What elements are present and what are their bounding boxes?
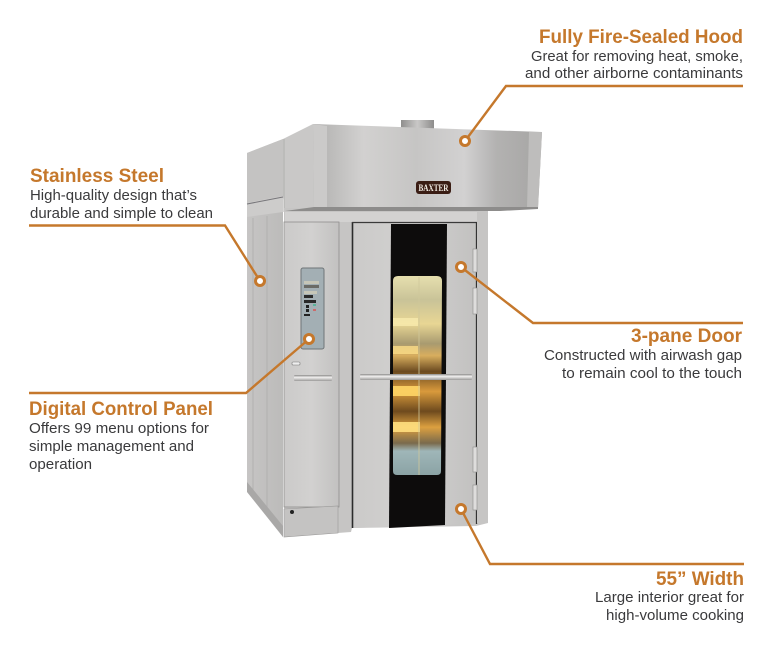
flue collar xyxy=(401,120,434,130)
callout: 3-pane Door: to remain cool to the touch xyxy=(562,366,742,382)
left key slot xyxy=(292,362,300,365)
hood xyxy=(285,124,542,211)
callout: Digital Control Panel: operation xyxy=(29,457,92,473)
control panel xyxy=(301,268,324,349)
heading: Digital Control Panel xyxy=(29,398,213,420)
marker xyxy=(456,262,466,272)
description: Offers 99 menu options for xyxy=(29,421,209,437)
leader line xyxy=(29,226,260,281)
left access panel xyxy=(284,222,339,507)
oven illustration xyxy=(247,120,542,537)
heading: 3-pane Door xyxy=(631,325,742,347)
callout: Fully Fire-Sealed Hood: and other airborne contaminants xyxy=(525,66,743,82)
door handle xyxy=(360,374,472,380)
heading: Fully Fire-Sealed Hood xyxy=(539,26,743,48)
door hinges xyxy=(473,249,477,510)
callout: Stainless Steel: durable and simple to clean xyxy=(30,206,213,222)
Baxter badge xyxy=(416,181,451,194)
leader line xyxy=(465,86,743,141)
Baxter badge: BAXTER xyxy=(418,184,449,194)
callout: 55" Width xyxy=(456,504,744,624)
callout: 55" Width: high-volume cooking xyxy=(606,608,744,624)
base plinth xyxy=(284,506,338,537)
heading: Stainless Steel xyxy=(30,165,164,187)
upper side housing xyxy=(247,124,330,212)
door window strip xyxy=(389,224,447,528)
callout: 3-pane Door xyxy=(456,262,743,382)
callout: Digital Control Panel xyxy=(29,334,314,473)
callout: Stainless Steel xyxy=(29,165,264,286)
description: Great for removing heat, smoke, xyxy=(531,49,743,65)
oven glass xyxy=(393,276,442,475)
marker xyxy=(456,504,466,514)
marker xyxy=(460,136,470,146)
leader line xyxy=(29,339,309,393)
heading: 55” Width xyxy=(656,568,744,590)
description: Constructed with airwash gap xyxy=(544,348,742,364)
front frame xyxy=(284,208,488,537)
description: Large interior great for xyxy=(595,590,744,606)
description: High-quality design that’s xyxy=(30,188,197,204)
marker xyxy=(304,334,314,344)
leader line xyxy=(461,267,743,323)
callout: Digital Control Panel: simple management and xyxy=(29,439,194,455)
right column xyxy=(477,212,488,523)
leader line xyxy=(461,509,744,564)
left handle xyxy=(294,375,332,381)
door xyxy=(352,222,476,528)
lower side wall xyxy=(247,196,283,537)
marker xyxy=(256,276,264,286)
callout: Fully Fire-Sealed Hood xyxy=(460,26,743,146)
